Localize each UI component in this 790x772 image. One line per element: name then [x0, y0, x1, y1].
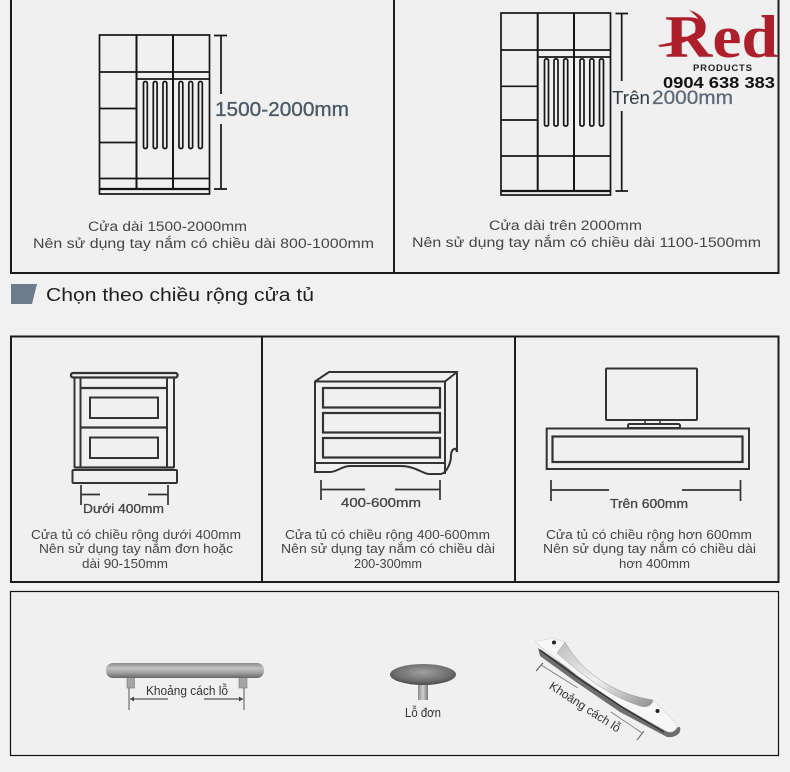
logo: Red Products — [658, 4, 778, 92]
icon: heading marker — [11, 284, 37, 304]
caption: 400-600mm: Nên sử dụng tay nắm có chiều dài — [281, 541, 495, 556]
dimension: 1500-2000mm — [214, 36, 349, 189]
caption: above 600mm: Nên sử dụng tay nắm có chiều dài — [543, 541, 756, 556]
heading: choose by door width: Chọn theo chiều rộng cửa tủ — [46, 285, 314, 305]
caption: left wardrobe: Nên sử dụng tay nắm có chiều dài 800-1000mm — [33, 236, 374, 251]
caption: right wardrobe — [412, 218, 761, 250]
panel: width options — [11, 336, 778, 582]
caption: under 400mm — [31, 528, 241, 571]
logo: Red Products: PRODUCTS — [693, 63, 752, 74]
dimension: above 600mm: Trên 600mm — [610, 496, 688, 511]
caption: 400-600mm: Cửa tủ có chiều rộng 400-600mm — [285, 528, 490, 542]
dimension: 1500-2000mm: 1500-2000mm — [215, 99, 349, 121]
dimension: 400-600mm: 400-600mm — [341, 495, 421, 510]
TV and console — [547, 368, 749, 469]
bar handle — [106, 663, 264, 710]
dimension: above 600mm — [551, 480, 740, 511]
bar handle: Khoảng cách lỗ — [146, 683, 228, 698]
dimension: above 2000mm — [612, 14, 733, 191]
caption: left wardrobe — [33, 219, 374, 251]
dimension: above 2000mm: 2000mm — [652, 87, 733, 109]
caption: above 600mm: Cửa tủ có chiều rộng hơn 600mm — [546, 528, 752, 542]
caption: right wardrobe: Nên sử dụng tay nắm có chiều dài 1100-1500mm — [412, 235, 761, 250]
knob handle — [390, 664, 456, 720]
logo: Red Products: Red — [665, 4, 778, 70]
dimension: under 400mm — [81, 485, 168, 516]
caption: 400-600mm: 200-300mm — [354, 557, 422, 571]
caption: left wardrobe: Cửa dài 1500-2000mm — [88, 219, 247, 234]
knob handle: Lỗ đơn — [405, 705, 441, 720]
caption: under 400mm: Cửa tủ có chiều rộng dưới 400mm — [31, 528, 241, 542]
wardrobe 1500-2000mm — [100, 35, 210, 194]
curved pull handle — [535, 638, 680, 740]
caption: right wardrobe: Cửa dài trên 2000mm — [489, 218, 642, 233]
dimension: 400-600mm — [321, 480, 440, 510]
wardrobe above 2000mm — [501, 13, 610, 195]
dimension: above 2000mm: Trên — [612, 88, 650, 108]
caption: above 600mm — [543, 528, 756, 571]
logo: Red Products: 0904 638 383 — [663, 75, 775, 92]
caption: under 400mm: dài 90-150mm — [82, 557, 168, 571]
caption: under 400mm: Nên sử dụng tay nắm đơn hoặc — [39, 541, 233, 556]
caption: 400-600mm — [281, 528, 495, 571]
panel: height options — [11, 0, 778, 273]
dresser — [315, 372, 457, 474]
dimension: under 400mm: Dưới 400mm — [83, 501, 164, 516]
caption: above 600mm: hơn 400mm — [619, 557, 690, 571]
curved pull handle: Khoảng cách lỗ — [547, 678, 624, 735]
nightstand — [71, 373, 178, 483]
panel: handle types — [10, 592, 778, 756]
